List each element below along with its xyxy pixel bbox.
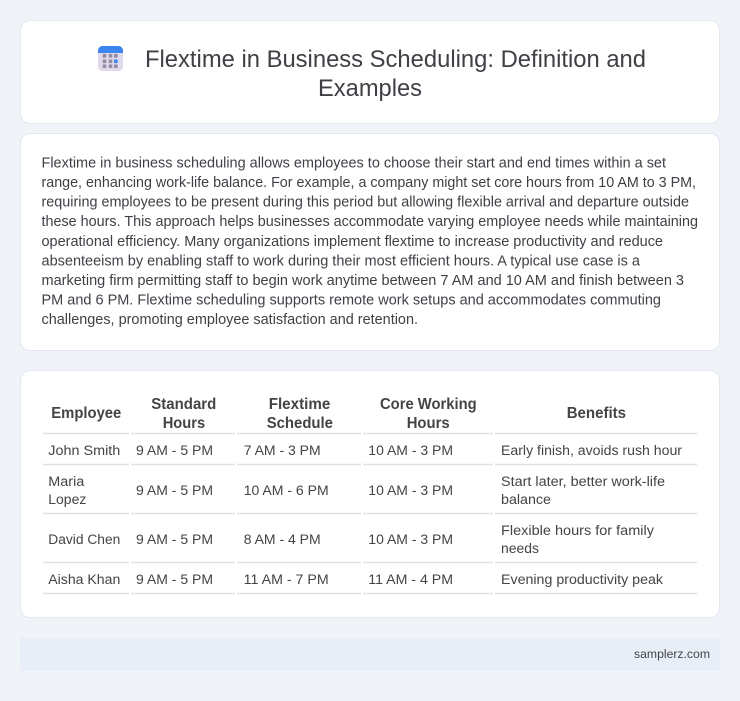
row: David Chen: David Chen (48, 532, 120, 548)
row: Aisha Khan: 9 AM - 5 PM (136, 572, 213, 588)
table header: Employee (51, 405, 122, 422)
table card (20, 370, 720, 618)
header card (20, 20, 720, 124)
row: John Smith: 7 AM - 3 PM (244, 443, 321, 459)
title (145, 46, 646, 102)
row: David Chen: 9 AM - 5 PM (136, 532, 213, 548)
title: Flextime in Business Scheduling: Definition and (145, 46, 646, 73)
paragraph card (20, 133, 720, 351)
row: Maria Lopez (48, 474, 665, 508)
row: Aisha Khan: Evening productivity peak (501, 572, 664, 588)
description text: range, enhancing work-life balance. For example, a company might set core hours from 10 AM to 3 PM, (42, 175, 696, 191)
row: Maria Lopez: Maria (48, 474, 84, 490)
title: Examples (318, 75, 422, 102)
row: Maria Lopez: Start later, better work-life (501, 474, 665, 490)
row: Aisha Khan: Aisha Khan (48, 572, 120, 588)
table header (51, 396, 626, 432)
row: David Chen: 10 AM - 3 PM (368, 532, 453, 548)
description text: challenges, promoting employee satisfaction and retention. (42, 312, 418, 328)
row: David Chen (48, 523, 655, 557)
row: David Chen: needs (501, 541, 539, 557)
row: Maria Lopez: 10 AM - 3 PM (368, 483, 453, 499)
table header: Hours (407, 415, 450, 432)
description text: these hours. This approach helps businesses accommodate varying employee needs while maintaining (42, 214, 698, 230)
row: Maria Lopez: 9 AM - 5 PM (136, 483, 213, 499)
table header: Schedule (267, 415, 333, 432)
description text: marketing firm permitting staff to begin work anytime between 7 AM and 10 AM and finish between 3 (42, 273, 684, 289)
table header: Standard (151, 396, 216, 413)
row: John Smith (48, 443, 682, 459)
icon: calendar (98, 46, 123, 71)
description text: PM and 6 PM. Flextime scheduling supports remote work setups and accommodates commuting (42, 292, 661, 308)
table header: Benefits (567, 405, 626, 422)
row: Maria Lopez: balance (501, 492, 551, 508)
row: Maria Lopez: 10 AM - 6 PM (244, 483, 329, 499)
row: John Smith: John Smith (48, 443, 120, 459)
row: John Smith: 10 AM - 3 PM (368, 443, 453, 459)
row: David Chen: 8 AM - 4 PM (244, 532, 321, 548)
description text: Flextime in business scheduling allows employees to choose their start and end times within a set (42, 156, 666, 172)
description text: absenteeism by enabling staff to work during their most efficient hours. A typical use case is a (42, 254, 640, 270)
description text: operational efficiency. Many organizations implement flextime to increase productivity and reduce (42, 234, 663, 250)
footer bar (20, 638, 720, 671)
row: David Chen: Flexible hours for family (501, 523, 655, 539)
description text: requiring employees to be present during this period but allowing flexible arrival and departure outside (42, 195, 689, 211)
table header: Hours (163, 415, 205, 432)
row: Aisha Khan (48, 572, 664, 588)
table header: Flextime (269, 396, 331, 413)
footer text: samplerz.com (634, 647, 710, 661)
row: Aisha Khan: 11 AM - 7 PM (244, 572, 329, 588)
description text (42, 156, 698, 328)
table header: Core Working (380, 396, 477, 413)
row: Aisha Khan: 11 AM - 4 PM (368, 572, 453, 588)
row: John Smith: Early finish, avoids rush hour (501, 443, 682, 459)
table (43, 396, 697, 594)
row: John Smith: 9 AM - 5 PM (136, 443, 213, 459)
row: Maria Lopez: Lopez (48, 492, 86, 508)
